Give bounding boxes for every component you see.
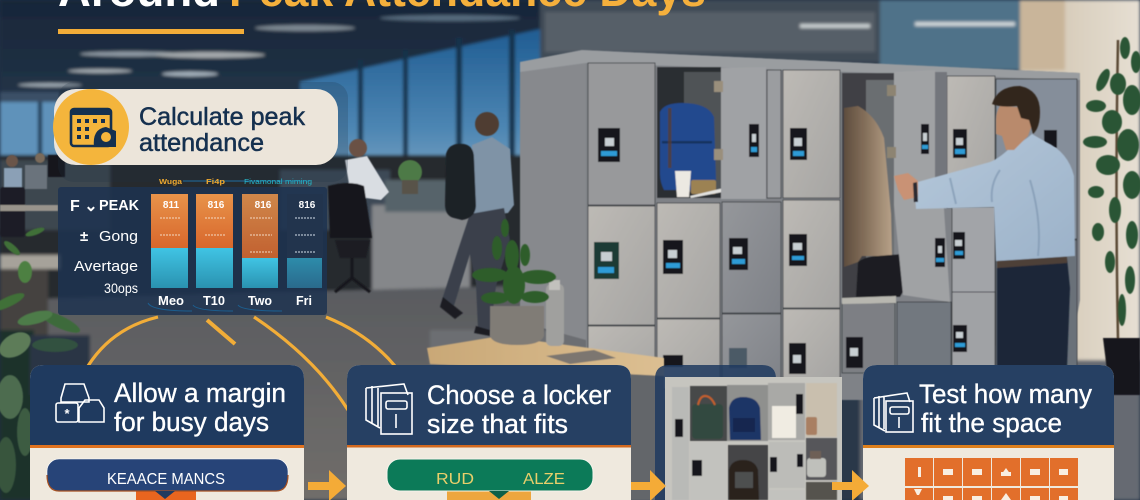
icon: locker — [874, 393, 913, 432]
panel: choose a locker size: Choose a locker — [427, 380, 611, 410]
bar: Fri: 816 — [299, 200, 316, 211]
chart row labels — [70, 197, 139, 296]
icon: bags — [56, 384, 104, 422]
panel: calculate peak attendance — [53, 82, 348, 315]
bar: T10 — [193, 194, 233, 311]
arrow: step 1 to step 2 — [308, 470, 346, 500]
blue backpack — [729, 397, 761, 440]
pill heading: calculate peak attendance: attendance — [139, 129, 264, 157]
panel: allow a margin — [30, 365, 304, 500]
desk with plant, bottle and notebook — [427, 219, 664, 500]
bar: T10: T10 — [203, 293, 225, 308]
locker keypad screens — [594, 124, 1057, 374]
arrow: step 2 to step 3 — [631, 470, 666, 500]
bar: T10: 816 — [208, 200, 225, 211]
icon: calendar with badge — [71, 109, 116, 147]
pill label: RUD — [436, 471, 474, 488]
left foreground plant — [0, 226, 82, 493]
bar: Meo — [148, 194, 192, 311]
title underline — [58, 29, 244, 34]
open locker with coat and bag — [842, 70, 950, 304]
chart row labels: Gong — [99, 228, 138, 245]
chart top labels: Wuga — [159, 179, 182, 186]
pill label — [387, 459, 593, 500]
open locker with blue backpack — [657, 67, 766, 199]
panel: choose a locker size: size that fits — [427, 409, 568, 439]
bar: Meo: Meo — [158, 293, 184, 308]
pill heading: calculate peak attendance — [53, 89, 338, 165]
pill heading: calculate peak attendance: Calculate peak — [139, 103, 305, 131]
panel: test how many fit: Test how many — [919, 379, 1092, 409]
man opening a locker — [894, 86, 1075, 368]
panel: choose a locker size — [347, 365, 631, 500]
locker doors — [588, 63, 1077, 389]
bar: Fri — [287, 194, 323, 308]
icon: locker — [366, 384, 412, 434]
seated office workers and chairs — [0, 139, 422, 292]
chart row labels: ± — [80, 228, 88, 245]
chart row labels: PEAK — [99, 197, 139, 214]
chart row labels: F ⌄ — [70, 198, 98, 215]
right side plant — [1083, 37, 1140, 395]
black bag — [729, 460, 759, 500]
panel: locker cabinet photograph — [655, 365, 842, 500]
chart row labels: Avertage — [74, 258, 138, 275]
arrow: step 3 to step 4 — [832, 470, 869, 500]
icon: bags: * — [64, 406, 70, 421]
pill label: ALZE — [523, 471, 565, 488]
panel: allow a margin: Allow a margin — [114, 378, 286, 408]
capacity grid — [905, 458, 1078, 500]
pill label — [47, 459, 288, 500]
bar: Meo: 811 — [163, 200, 180, 211]
walking person with backpack — [440, 112, 514, 336]
white note — [772, 406, 796, 438]
bar: Fri: Fri — [296, 293, 312, 308]
bar: Two: Two — [248, 293, 272, 308]
locker bank — [520, 50, 1080, 400]
chart panel: weekly attendance bars — [58, 179, 327, 315]
green bag — [692, 404, 723, 439]
panel: test how many fit — [863, 365, 1114, 500]
yellow connector arcs — [88, 317, 395, 410]
panel: test how many fit: fit the space — [921, 408, 1062, 438]
bar: Two: 816 — [255, 200, 272, 211]
chart top labels: Fi4p — [206, 179, 225, 186]
locker carcass — [520, 50, 1080, 400]
pill label: KEAACE MANCS — [107, 471, 225, 488]
bar: Two — [238, 194, 282, 311]
chart row labels: 30ops — [104, 280, 138, 296]
cabinet screens — [675, 394, 803, 476]
chart top labels — [159, 179, 312, 186]
chart top labels: Fivamonal miming — [244, 179, 312, 186]
cabinet compartments — [672, 383, 837, 500]
panel: allow a margin: for busy days — [114, 407, 269, 437]
